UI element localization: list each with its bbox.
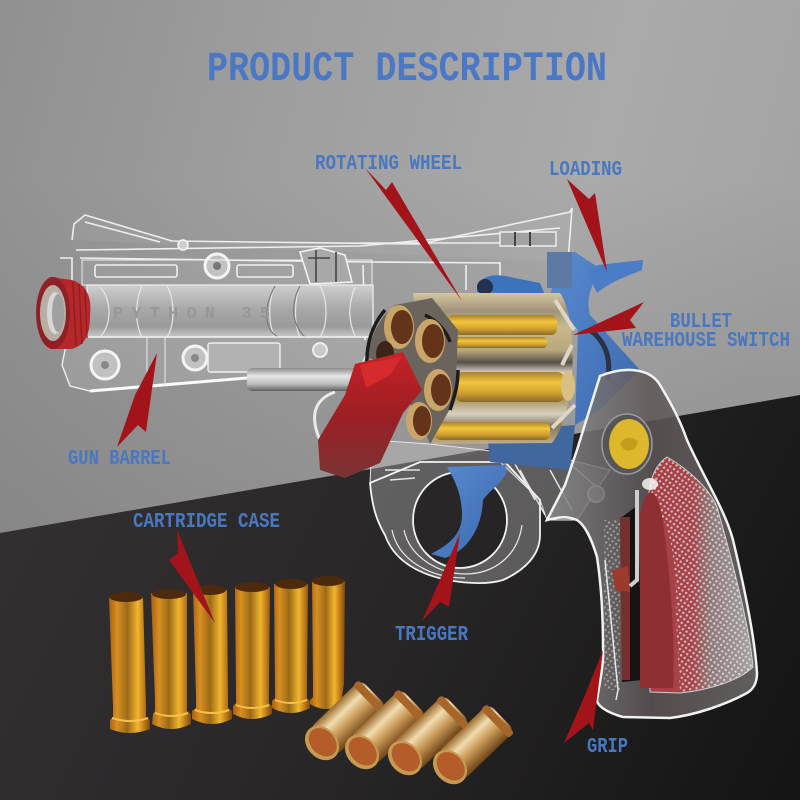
blue hammer and mechanism	[477, 252, 643, 470]
grip dotted strip	[604, 520, 620, 690]
top frame: clear plastic	[60, 208, 572, 340]
arrow: loading	[567, 179, 607, 272]
title: PRODUCT DESCRIPTION	[207, 45, 607, 93]
barrel tube: PYTHON 35	[113, 305, 270, 324]
grip	[547, 370, 757, 718]
cylinder front face	[367, 298, 458, 444]
arrow: rotating wheel	[365, 168, 462, 301]
rear sight mechanism	[300, 232, 556, 284]
magazine latch	[612, 490, 637, 592]
background: dark table	[0, 395, 800, 800]
clear frame lower body	[370, 440, 610, 520]
label: bullet warehouse switch: BULLET	[670, 311, 732, 334]
gold medallion	[602, 414, 652, 474]
arrow: cartridge case	[169, 530, 215, 623]
label: bullet warehouse switch	[622, 311, 790, 353]
blue trigger	[431, 465, 507, 558]
lower frame under barrel	[62, 337, 373, 450]
label: rotating wheel: ROTATING WHEEL	[315, 153, 462, 176]
red magazine	[640, 492, 674, 688]
frame screws	[91, 240, 327, 379]
bullets, lying	[297, 679, 516, 792]
red strip	[620, 517, 630, 680]
revolver	[36, 208, 757, 718]
red cylinder release	[318, 352, 422, 478]
trigger guard	[370, 462, 540, 583]
red muzzle	[36, 277, 90, 349]
gold cylinder flutes	[435, 300, 575, 440]
arrow: grip	[564, 650, 603, 743]
magazine channel	[622, 505, 642, 682]
cartridge cases, standing	[109, 576, 345, 733]
cylinder body	[413, 293, 573, 444]
barrel tube	[87, 285, 373, 337]
label: grip: GRIP	[587, 736, 628, 759]
arrow: bullet warehouse switch	[573, 302, 644, 335]
grip dotted panel	[648, 457, 753, 693]
steel ejector rod	[247, 368, 361, 391]
chamber openings	[376, 305, 452, 440]
arrow: gun barrel	[117, 353, 157, 447]
label: gun barrel: GUN BARREL	[68, 448, 171, 471]
label: cartridge case: CARTRIDGE CASE	[133, 511, 280, 534]
label: loading: LOADING	[549, 159, 622, 182]
arrow: trigger	[422, 533, 460, 621]
highlight on frame	[642, 478, 658, 490]
label: trigger: TRIGGER	[395, 624, 468, 647]
